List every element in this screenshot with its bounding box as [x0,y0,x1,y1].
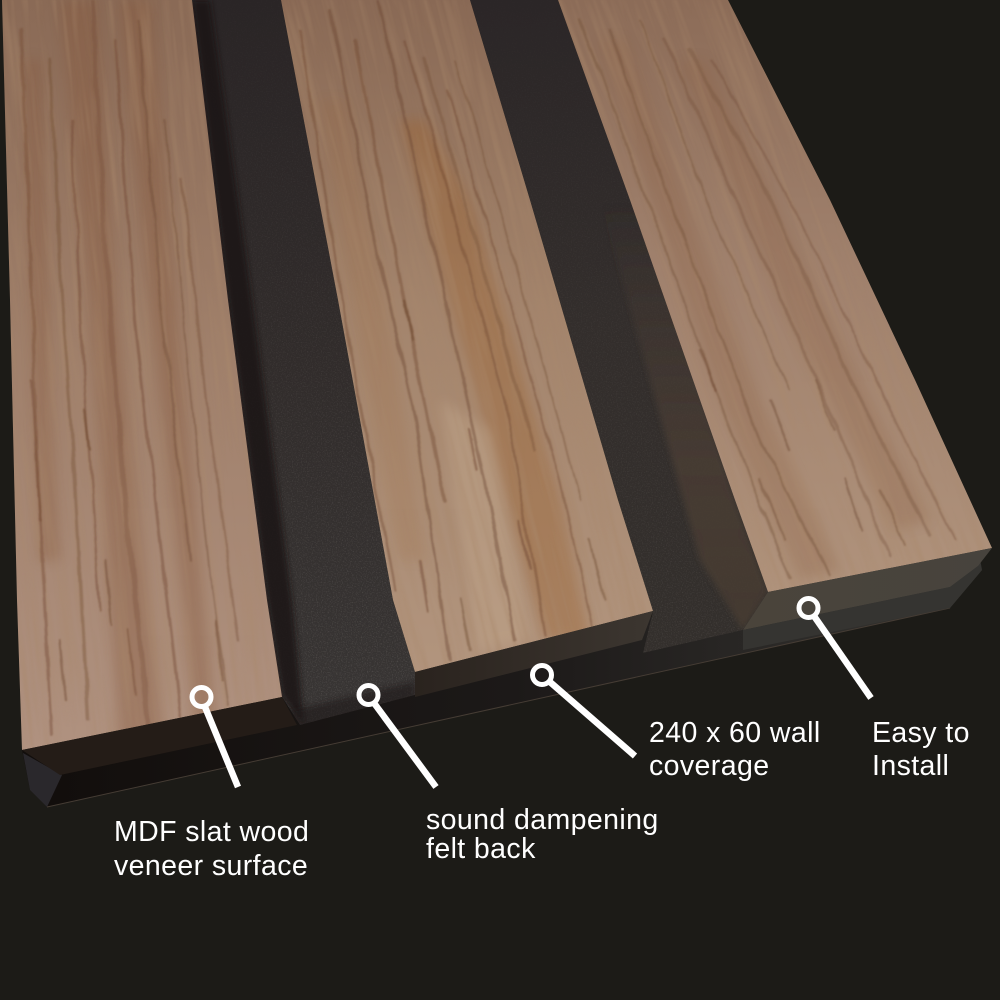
label 3: coverage [649,750,769,782]
backing board strip [22,548,982,807]
wood slat 3 [558,0,992,592]
pointer 2 [359,686,436,787]
slat 3 front face [743,548,992,630]
bottom board edge highlight [47,608,950,807]
wood slat 1 [2,0,282,750]
label 1: MDF slat wood [114,816,309,848]
felt corner at left end [23,753,62,807]
callout: sound dampening felt back [359,686,659,865]
label 2: felt back [426,833,536,865]
callout: 240 x 60 wall coverage [532,666,821,782]
pointer 3 [532,666,635,756]
pointer 1 [192,688,238,787]
callout: MDF slat wood veneer surface [114,688,309,882]
label 4: Easy to [872,717,970,749]
felt channel 2 [465,0,775,660]
label 4: Install [872,750,949,782]
slat 2 front face [415,611,653,697]
label 3: 240 x 60 wall [649,717,821,749]
wood slat 2 [281,0,653,672]
slat 1 front face [22,697,297,775]
callout: Easy to Install [799,598,970,782]
label 1: veneer surface [114,850,308,882]
pointer 4 [799,598,871,698]
label 2: sound dampening [426,804,659,836]
felt channel 1 [190,0,420,730]
right end tongue [743,566,982,650]
